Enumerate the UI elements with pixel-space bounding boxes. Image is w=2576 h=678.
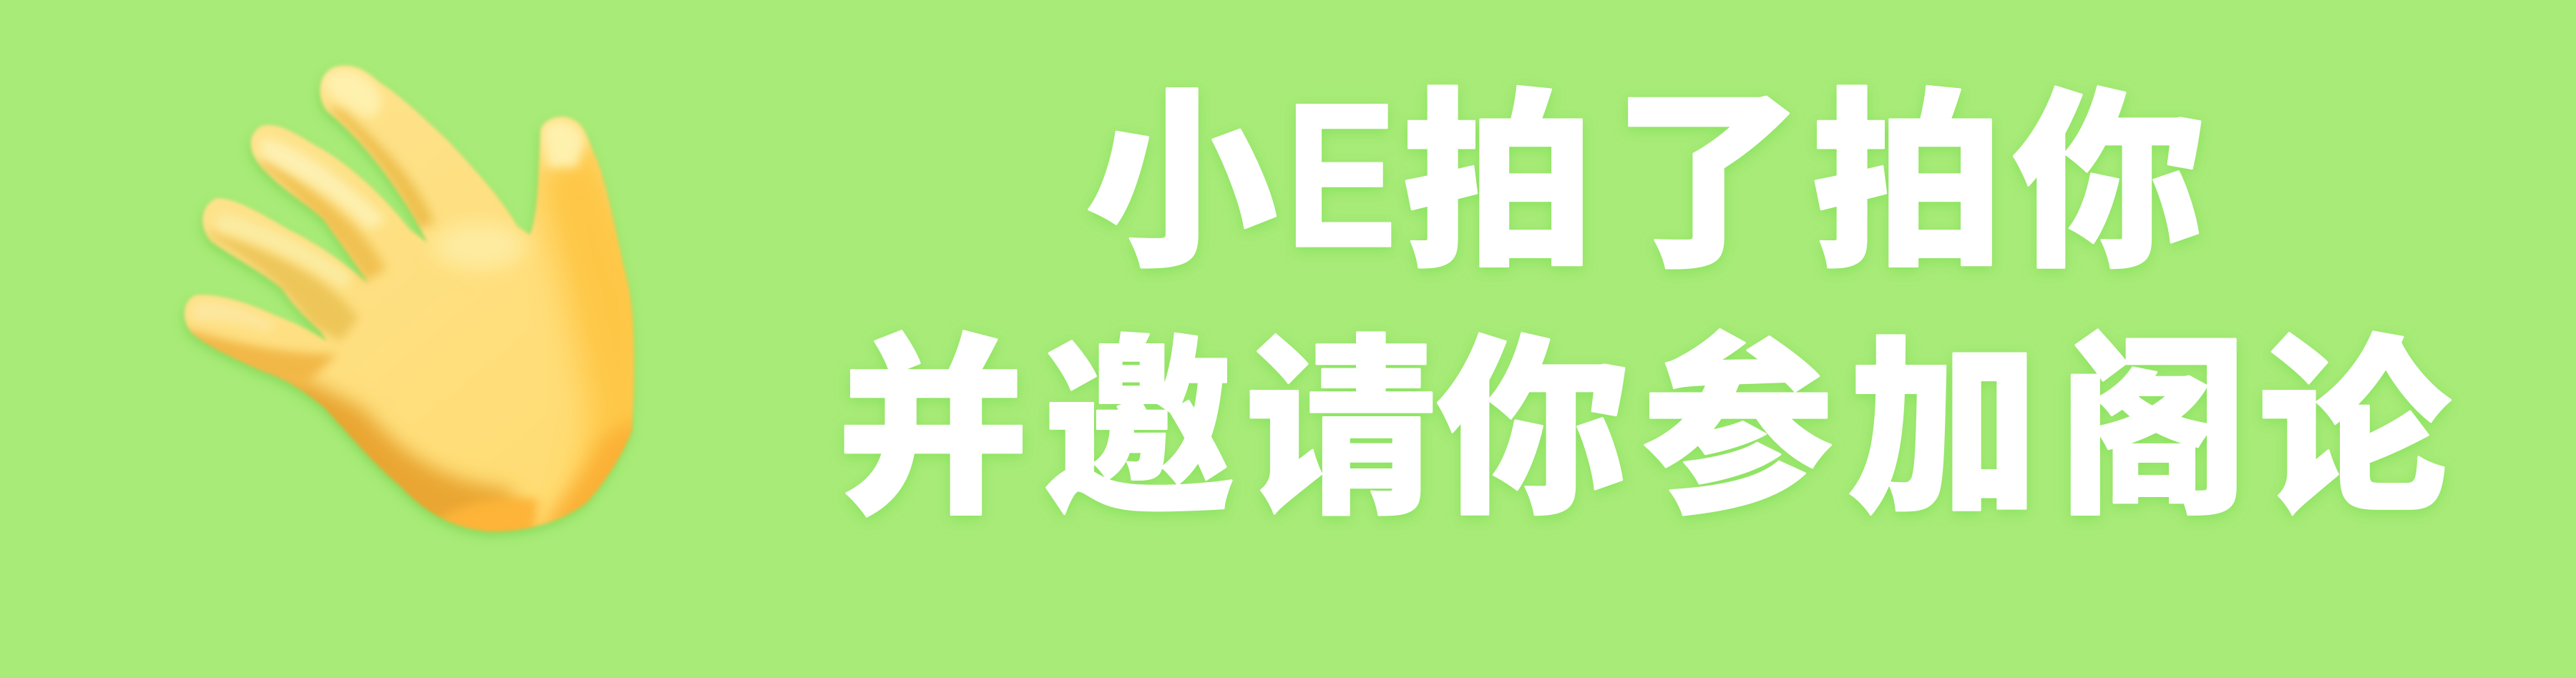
title: line 1: 小拍了拍你 xyxy=(1085,76,2205,290)
icon: waving hand xyxy=(180,64,638,539)
title: line 2: 并邀请你参加阁论 xyxy=(837,323,2453,537)
title: line 1: E xyxy=(1286,61,1397,290)
